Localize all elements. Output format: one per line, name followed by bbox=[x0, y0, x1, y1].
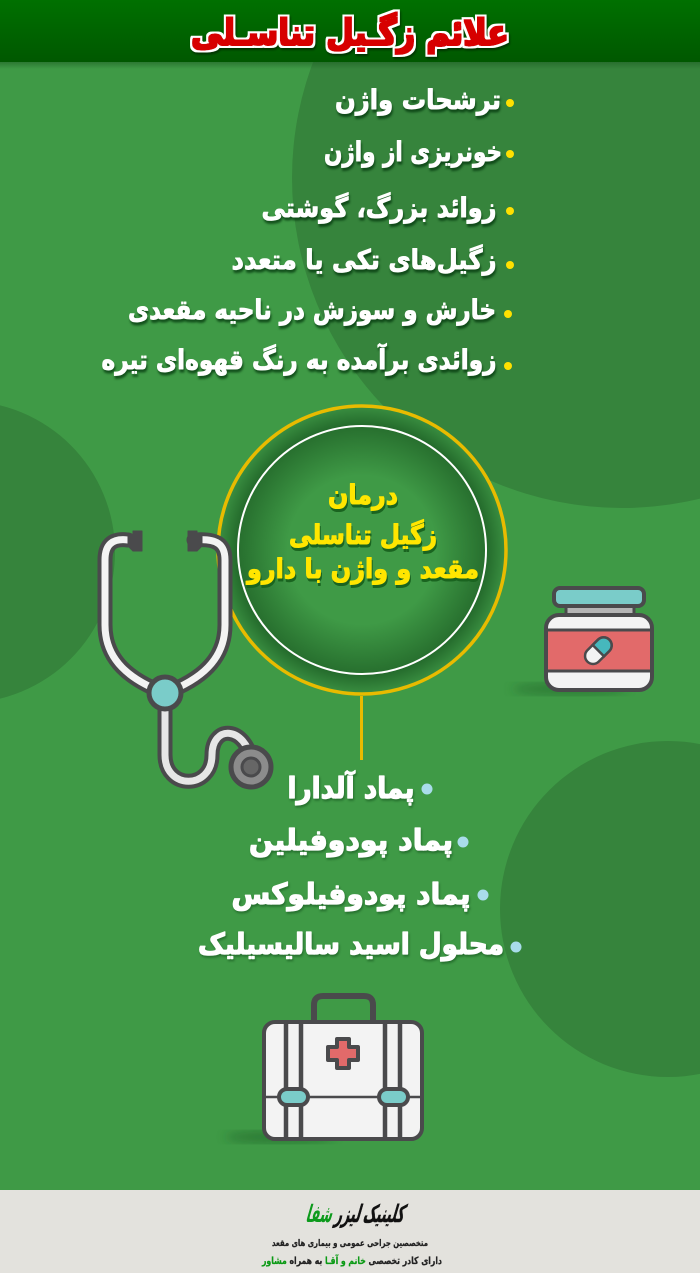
footer line 2: دارای کادر تخصصی خانم و آقـا به همراه مشاور bbox=[261, 1254, 442, 1267]
treatment 2: پماد پودوفیلین bbox=[249, 823, 453, 858]
symptom 2: خونریزی از واژن bbox=[324, 137, 502, 168]
background circle: top right bbox=[292, 0, 700, 508]
treatment 3: پماد پودوفیلوکس bbox=[232, 877, 470, 912]
symptom 5: خارش و سوزش در ناحیه مقعدی bbox=[128, 295, 496, 326]
treatments list bbox=[198, 770, 522, 961]
title: علائم زگـیل تناسـلی bbox=[191, 12, 509, 54]
connector line bbox=[360, 696, 363, 760]
circle heading: زگیل تناسلی bbox=[289, 519, 437, 551]
circle heading: درمان bbox=[328, 480, 398, 511]
icon: first aid case bbox=[225, 996, 422, 1143]
symptoms list bbox=[102, 85, 514, 376]
background circle: left bbox=[0, 401, 115, 703]
icon: medicine jar bbox=[512, 588, 652, 695]
symptom 1: ترشحات واژن bbox=[335, 85, 501, 116]
footer panel bbox=[0, 1190, 700, 1273]
symptom 3: زوائد بزرگ، گوشتی bbox=[262, 192, 496, 224]
treatment 1: پماد آلدارا bbox=[288, 770, 414, 806]
icon: stethoscope bbox=[105, 531, 271, 787]
background circle: bottom right bbox=[500, 741, 700, 1077]
treatment 4: محلول اسید سالیسیلیک bbox=[198, 927, 504, 961]
symptom 6: زوائدی برآمده به رنگ قهوه‌ای تیره bbox=[102, 343, 496, 376]
symptom 4: زگیل‌های تکی یا متعدد bbox=[232, 244, 496, 276]
footer line 1: متخصصین جراحی عمومی و بیماری های مقعد bbox=[272, 1239, 428, 1249]
clinic logo: کلینیک لیزر شفا bbox=[303, 1201, 409, 1228]
header band bbox=[0, 0, 700, 69]
circle heading bbox=[245, 480, 479, 585]
central circle bbox=[218, 406, 506, 694]
circle heading: مقعد و واژن با دارو bbox=[245, 554, 479, 585]
